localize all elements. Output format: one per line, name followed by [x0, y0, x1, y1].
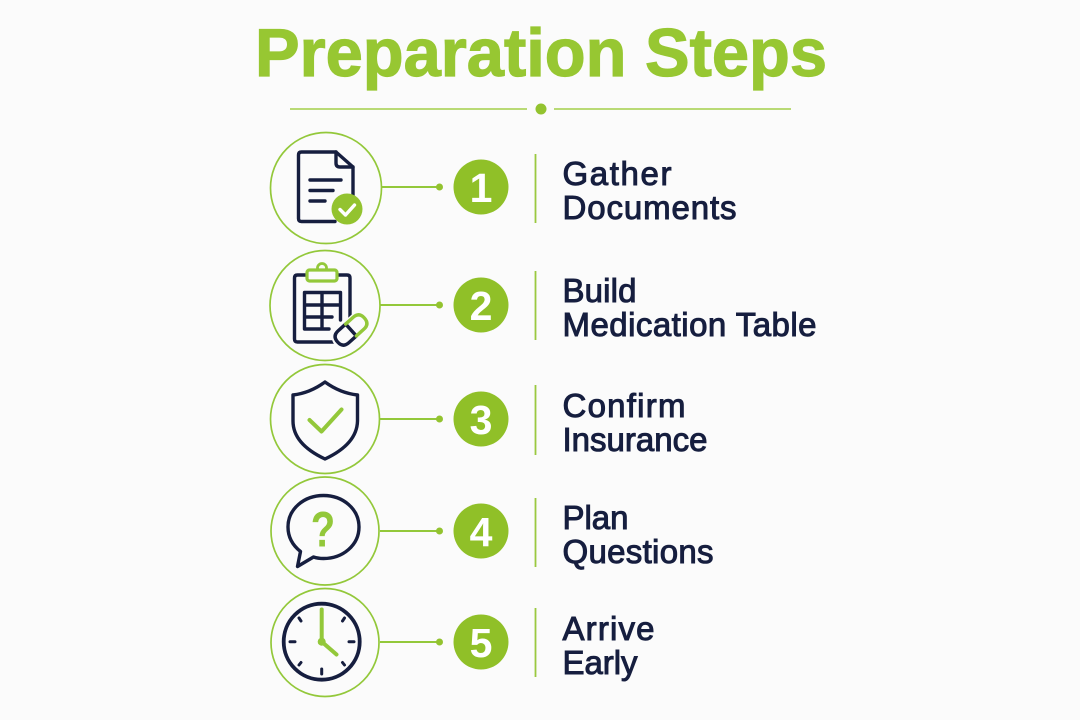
label: build medication table: Build	[562, 272, 636, 309]
label: plan questions: Plan	[562, 499, 628, 536]
label: plan questions	[562, 499, 714, 570]
label: build medication table: Medication Table	[562, 306, 816, 343]
connector 5	[380, 638, 443, 646]
icon: clock	[271, 588, 379, 696]
number badge 4	[454, 504, 508, 558]
label: confirm insurance	[562, 387, 708, 458]
icon: speech bubble with question mark: ?	[311, 501, 335, 558]
number badge 1	[454, 160, 508, 214]
number badge 5	[454, 614, 508, 670]
divider 4	[534, 498, 536, 567]
step 2: build medication table	[270, 250, 816, 360]
step 3: confirm insurance	[270, 364, 708, 474]
label: gather documents	[562, 155, 736, 226]
icon: clipboard table with pill	[270, 250, 380, 360]
icon: document with check	[270, 132, 382, 244]
step 4: plan questions	[271, 477, 714, 585]
icon: speech bubble with question mark	[271, 477, 379, 585]
number badge 1: 1	[470, 165, 492, 211]
number badge 3: 3	[470, 397, 492, 443]
label: arrive early	[562, 610, 654, 681]
step 1: gather documents	[270, 132, 736, 244]
divider 5	[534, 608, 536, 677]
label: build medication table	[562, 272, 816, 343]
connector 2	[380, 302, 443, 308]
icon: shield with check	[270, 364, 380, 474]
connector 4	[380, 528, 443, 534]
divider 3	[534, 385, 536, 455]
divider 2	[534, 271, 536, 340]
step 5: arrive early	[271, 588, 654, 696]
label: arrive early: Arrive	[562, 610, 654, 647]
label: plan questions: Questions	[562, 533, 714, 570]
number badge 2: 2	[470, 283, 492, 329]
number badge 2	[454, 278, 508, 332]
number badge 4: 4	[470, 509, 493, 555]
number badge 3	[454, 392, 508, 446]
label: gather documents: Gather	[562, 155, 672, 192]
label: arrive early: Early	[562, 644, 638, 681]
connector 3	[380, 416, 443, 422]
label: gather documents: Documents	[562, 189, 736, 226]
label: confirm insurance: Insurance	[562, 421, 708, 458]
title: Preparation Steps	[255, 15, 827, 91]
connector 1	[382, 184, 443, 190]
label: confirm insurance: Confirm	[562, 387, 686, 424]
divider 1	[534, 154, 536, 223]
number badge 5: 5	[470, 620, 492, 666]
title divider with dot	[290, 104, 791, 114]
